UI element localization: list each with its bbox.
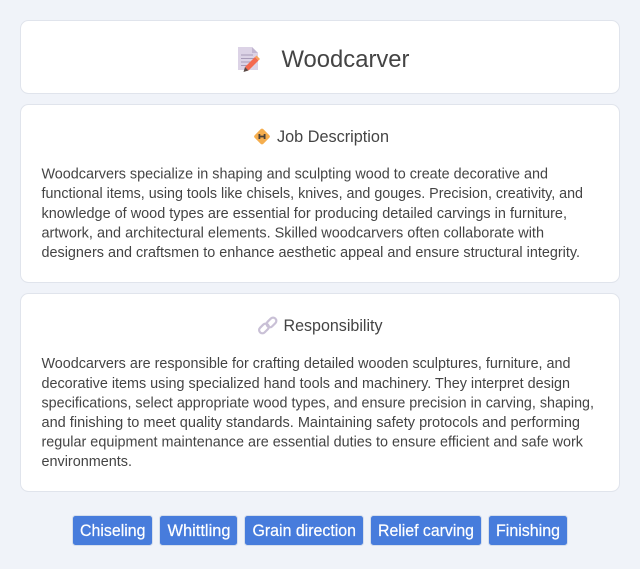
heading: Woodcarver: Woodcarver (282, 46, 410, 73)
tag: Finishing: Finishing (496, 521, 560, 540)
text: responsibility paragraph: and finishing to meet quality standards. Maintaining safety protocols and performing (42, 415, 580, 431)
tag: Chiseling (72, 516, 152, 546)
tag: Grain direction: Grain direction (252, 521, 356, 540)
tag: Relief carving (370, 516, 482, 546)
text: responsibility paragraph: environments. (42, 454, 132, 470)
panel: responsibility (20, 294, 620, 492)
text: job description paragraph: Woodcarvers specialize in shaping and sculpting wood to create decorative and (42, 166, 548, 182)
tag: Grain direction (244, 516, 364, 546)
heading: Responsibility: Responsibility (284, 316, 383, 335)
text: responsibility paragraph: specifications, select appropriate wood types, and ensure precision in carving, shaping, (42, 396, 594, 412)
text: job description paragraph: functional items, using tools like chisels, knives, and gouges. Precision, creativity, and (42, 186, 583, 202)
text: responsibility paragraph (42, 356, 594, 470)
heading: Job Description: Job Description (277, 127, 389, 146)
panel: job description (20, 104, 620, 282)
tag: Finishing (488, 516, 568, 546)
tag: Relief carving: Relief carving (378, 521, 474, 540)
panel: title (20, 20, 620, 94)
text: job description paragraph: knowledge of wood types are essential for producing detailed carvings in furniture, (42, 206, 567, 222)
icon: construction diamond (253, 128, 271, 145)
icon: chain link (258, 316, 278, 335)
tag row (72, 516, 568, 546)
icon: document with pencil (238, 47, 260, 72)
text: job description paragraph: designers and craftsmen to enhance aesthetic appeal and ensure structural integrity. (42, 245, 580, 261)
text: job description paragraph (42, 166, 583, 261)
tag: Chiseling: Chiseling (80, 521, 146, 540)
text: responsibility paragraph: decorative items using specialized hand tools and machinery. They interpret design (42, 376, 570, 392)
text: responsibility paragraph: regular equipment maintenance are essential duties to ensure efficient and safe work (42, 434, 584, 450)
text: responsibility paragraph: Woodcarvers are responsible for crafting detailed wooden sculptures, furniture, and (42, 356, 570, 372)
tag: Whittling: Whittling (168, 521, 230, 540)
tag: Whittling (160, 516, 238, 546)
text: job description paragraph: artwork, and architectural elements. Skilled woodcarvers often collaborate with (42, 226, 544, 242)
